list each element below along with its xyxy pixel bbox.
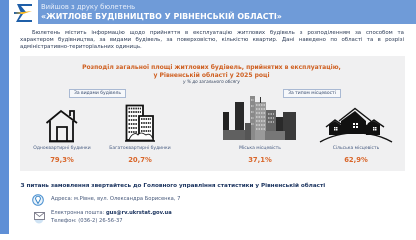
panel: distribution xyxy=(20,56,405,171)
contact heading: З питань замовлення звертайтесь до Головного управління статистики у Рівненській області xyxy=(20,183,325,189)
caption: rural: Сільська місцевість xyxy=(333,146,379,151)
panel heading: Розподіл загальної площі житлових будівель, прийнятих в експлуатацію, xyxy=(82,64,341,70)
value: single-family: 79,3% xyxy=(50,156,74,164)
tab: by building type: За видами будівель xyxy=(74,91,121,96)
icon: city skyline xyxy=(223,96,296,140)
icon: sigma logo xyxy=(14,4,32,22)
intro paragraph: характером будівництва, за видами будівель, за поверховістю, кількістю квартир. Дані наведено по області та в розрізі xyxy=(20,37,404,43)
email: Електронна пошта: gus@rv.ukrstat.gov.ua xyxy=(51,210,172,216)
intro paragraph: Бюлетень містить інформацію щодо прийняття в експлуатацію житлових будівель з розподіленням за способом та xyxy=(32,30,404,36)
panel heading xyxy=(82,64,341,78)
intro paragraph: адміністративно-територіальних одиниць. xyxy=(20,44,142,50)
tab: by building type xyxy=(69,89,126,98)
intro paragraph xyxy=(20,30,404,50)
caption: multi-family: Багатоквартирні будинки xyxy=(109,146,171,151)
left blue band xyxy=(0,0,9,234)
icon: house xyxy=(46,110,78,142)
phone: Телефон: (036-2) 26-56-37 xyxy=(51,218,123,224)
icon: envelope xyxy=(34,212,45,224)
value: rural: 62,9% xyxy=(344,156,368,164)
header subtitle: Вийшов з друку бюлетень xyxy=(41,3,135,11)
icon: village houses xyxy=(320,108,392,143)
header band xyxy=(38,0,416,24)
value: multi-family: 20,7% xyxy=(128,156,152,164)
icon: location pin xyxy=(32,194,44,206)
panel heading: у Рівненській області у 2025 році xyxy=(153,72,270,78)
caption: urban: Міська місцевість xyxy=(239,146,281,151)
value: urban: 37,1% xyxy=(248,156,272,164)
address: Адреса: м.Рівне, вул. Олександра Борисенка, 7 xyxy=(51,196,180,202)
header title: «ЖИТЛОВЕ БУДІВНИЦТВО У РІВНЕНСЬКІЙ ОБЛАСТІ» xyxy=(41,12,282,21)
icon: apartment buildings xyxy=(125,104,155,142)
tab: by locality type xyxy=(283,89,341,98)
caption: single-family: Одноквартирні будинки xyxy=(33,146,91,151)
panel subtitle: у % до загального обсягу xyxy=(183,79,240,84)
tab: by locality type: За типом місцевості xyxy=(288,91,336,96)
